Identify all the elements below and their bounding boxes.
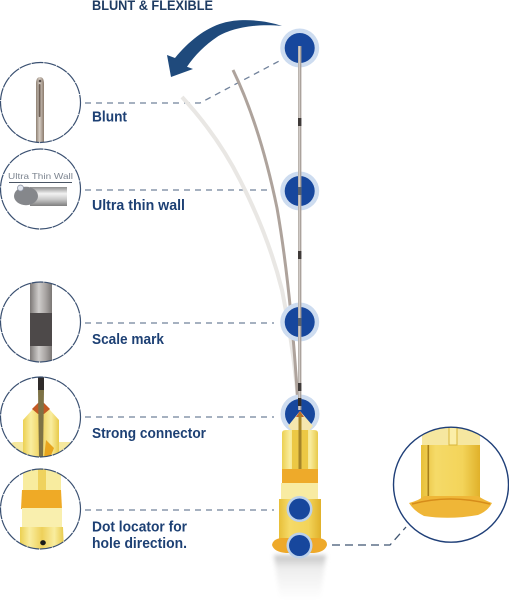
needle: slightly bent <box>233 70 298 405</box>
inset circle: dot locator <box>0 468 80 552</box>
leader line to detail circle <box>332 527 406 545</box>
inset circle: scale mark <box>0 280 80 364</box>
dot: scale <box>280 302 319 342</box>
arrow: bend direction <box>167 20 282 77</box>
inset circle: ultra thin wall <box>0 149 80 229</box>
dot: locator <box>286 496 312 522</box>
detail circle: luer flange <box>394 425 508 542</box>
dot: wall <box>280 172 319 210</box>
marker dots on needle <box>280 28 320 434</box>
hub: yellow connector <box>272 411 327 553</box>
label: blunt: Blunt <box>92 110 127 126</box>
label: scale mark: Scale mark <box>92 332 165 348</box>
dot: luer flange <box>286 532 312 558</box>
label: strong connector: Strong connector <box>92 426 206 442</box>
leader lines <box>85 59 283 510</box>
label: hole direction: hole direction. <box>92 536 187 552</box>
label: ultra thin wall: Ultra thin wall <box>92 198 185 214</box>
inset circle: strong connector <box>0 376 81 460</box>
dot: tip <box>280 28 319 68</box>
dot: connector <box>280 394 320 434</box>
inset caption: Ultra Thin Wall <box>8 171 73 181</box>
needle: most bent, pale <box>182 97 298 400</box>
needle: straight <box>298 46 301 410</box>
shadow under hub <box>274 555 326 600</box>
label: dot locator: Dot locator for <box>92 520 187 536</box>
inset circle: blunt tip <box>0 62 80 145</box>
